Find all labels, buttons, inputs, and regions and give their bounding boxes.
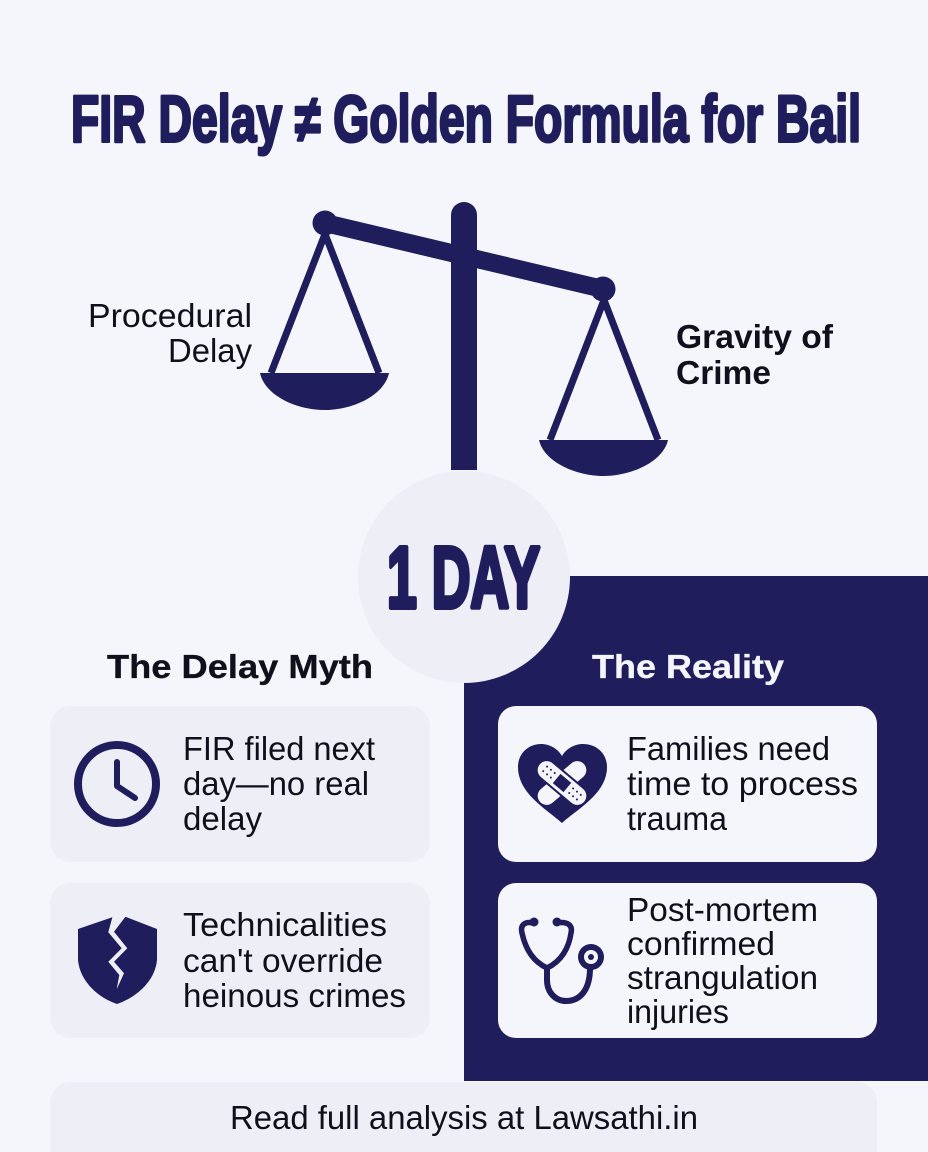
text: post-mortem: strangulation: [627, 960, 818, 997]
text: post-mortem: [627, 892, 818, 1031]
label: procedural delay: Delay: [168, 333, 252, 370]
panel: reality background: [464, 576, 928, 1081]
text: families need time: Families need: [627, 731, 830, 768]
card: technicalities: [50, 883, 430, 1038]
text: FIR filed next day: delay: [183, 801, 262, 838]
text: FIR filed next day: FIR filed next: [183, 731, 376, 768]
text: technicalities: heinous crimes: [183, 978, 406, 1015]
text: families need time: time to process: [627, 766, 858, 803]
card: FIR filed next day: [50, 706, 430, 862]
icon: clock: [78, 745, 156, 823]
badge: 1 day: [358, 471, 570, 683]
label: gravity of crime: Crime: [676, 355, 771, 392]
text: technicalities: can't override: [183, 943, 383, 980]
icon: balance scale: [260, 202, 668, 476]
text: FIR filed next day: day—no real: [183, 766, 369, 803]
label: procedural delay: Procedural: [88, 298, 252, 335]
label: gravity of crime: [676, 319, 834, 392]
text: families need time: [627, 731, 858, 838]
card: post-mortem: [498, 883, 877, 1038]
footer bar: [50, 1082, 877, 1152]
text: post-mortem: injuries: [627, 994, 729, 1031]
heading: the delay myth: The Delay Myth: [107, 649, 373, 686]
icon: heart with bandage: [518, 744, 607, 823]
text: technicalities: Technicalities: [183, 907, 387, 944]
text: post-mortem: Post-mortem: [627, 892, 818, 929]
icon: cracked shield: [78, 916, 157, 1004]
badge: 1 day: 1 DAY: [387, 530, 540, 626]
text: families need time: trauma: [627, 801, 727, 838]
label: procedural delay: [88, 298, 252, 370]
text: post-mortem: confirmed: [627, 926, 775, 963]
text: FIR filed next day: [183, 731, 376, 838]
footer text: Read full analysis at Lawsathi.in: [230, 1100, 698, 1137]
card: families need time: [498, 706, 877, 862]
label: gravity of crime: Gravity of: [676, 319, 834, 356]
heading: the reality: The Reality: [592, 649, 784, 686]
icon: stethoscope: [522, 918, 604, 1001]
text: technicalities: [183, 907, 406, 1015]
